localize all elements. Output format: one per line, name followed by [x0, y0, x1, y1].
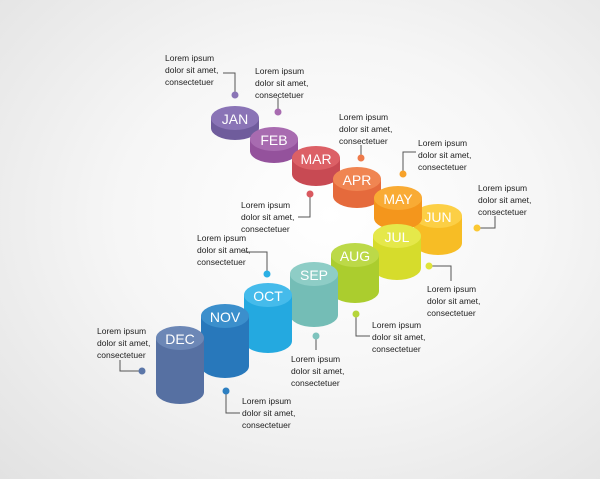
- callout: DEC: [97, 326, 150, 374]
- callout: MAR: [241, 190, 314, 234]
- callout: OCT: consectetuer: [197, 257, 246, 267]
- cylinder: SEP: SEP: [300, 267, 328, 283]
- callout: SEP: dolor sit amet,: [291, 366, 344, 376]
- cylinder: MAR: [292, 146, 340, 186]
- callout: SEP: consectetuer: [291, 378, 340, 388]
- callout: JAN: [165, 53, 238, 98]
- callout: APR: Lorem ipsum: [339, 112, 388, 122]
- callout: MAY: dolor sit amet,: [418, 150, 471, 160]
- callout: JUL: [426, 262, 480, 318]
- callout: JAN: Lorem ipsum: [165, 53, 214, 63]
- cylinder: AUG: [331, 243, 379, 303]
- callout: NOV: dolor sit amet,: [242, 408, 295, 418]
- cylinder: JAN: JAN: [222, 111, 248, 127]
- cylinder: JUN: JUN: [424, 209, 452, 225]
- callout: MAR: consectetuer: [241, 224, 290, 234]
- callout: JUN: Lorem ipsum: [478, 183, 527, 193]
- callout: OCT: dolor sit amet,: [197, 245, 250, 255]
- cylinder: APR: [333, 167, 381, 208]
- callout: NOV: Lorem ipsum: [242, 396, 291, 406]
- cylinder: FEB: FEB: [260, 132, 288, 148]
- callout: MAR: dolor sit amet,: [241, 212, 294, 222]
- callout: OCT: [197, 233, 270, 278]
- callout: FEB: consectetuer: [255, 90, 304, 100]
- callout: FEB: [255, 66, 308, 116]
- callout: JUN: [474, 183, 531, 232]
- cylinder: JUL: JUL: [385, 229, 410, 245]
- callout: AUG: dolor sit amet,: [372, 332, 425, 342]
- callout: JUL: consectetuer: [427, 308, 476, 318]
- callout: AUG: Lorem ipsum: [372, 320, 421, 330]
- cylinder: APR: APR: [343, 172, 371, 188]
- callout: JUN: consectetuer: [478, 207, 527, 217]
- callout: DEC: Lorem ipsum: [97, 326, 146, 336]
- cylinder: NOV: NOV: [210, 309, 241, 325]
- cylinder: JAN: [211, 106, 259, 140]
- cylinder: DEC: DEC: [165, 331, 195, 347]
- callout: APR: consectetuer: [339, 136, 388, 146]
- cylinder: JUL: [373, 224, 421, 280]
- cylinder: DEC: [156, 326, 204, 404]
- callout: SEP: Lorem ipsum: [291, 354, 340, 364]
- cylinder: FEB: [250, 127, 298, 163]
- cylinder: JUN: [414, 204, 462, 255]
- callout: JAN: consectetuer: [165, 77, 214, 87]
- cylinder: AUG: AUG: [340, 248, 370, 264]
- callout: SEP: [291, 332, 344, 388]
- callout: MAY: Lorem ipsum: [418, 138, 467, 148]
- callout: DEC: consectetuer: [97, 350, 146, 360]
- callout: NOV: [222, 388, 295, 430]
- callout: FEB: dolor sit amet,: [255, 78, 308, 88]
- callout: APR: dolor sit amet,: [339, 124, 392, 134]
- cylinder: MAR: MAR: [300, 151, 332, 167]
- callout: MAY: [400, 138, 471, 178]
- cylinder: SEP: [290, 262, 338, 327]
- callout: JUL: Lorem ipsum: [427, 284, 476, 294]
- callout: APR: [339, 112, 392, 162]
- cylinder: OCT: [244, 283, 292, 353]
- callout: AUG: [352, 310, 425, 354]
- callout: MAR: Lorem ipsum: [241, 200, 290, 210]
- cylinder: OCT: OCT: [253, 288, 283, 304]
- cylinder: MAY: MAY: [383, 191, 413, 207]
- cylinder: NOV: [201, 304, 249, 378]
- callout: NOV: consectetuer: [242, 420, 291, 430]
- callout: DEC: dolor sit amet,: [97, 338, 150, 348]
- callout: JUL: dolor sit amet,: [427, 296, 480, 306]
- callout: FEB: Lorem ipsum: [255, 66, 304, 76]
- callout: OCT: Lorem ipsum: [197, 233, 246, 243]
- callout: MAY: consectetuer: [418, 162, 467, 172]
- cylinder: MAY: [374, 186, 422, 230]
- callout: JAN: dolor sit amet,: [165, 65, 218, 75]
- callout: JUN: dolor sit amet,: [478, 195, 531, 205]
- callout: AUG: consectetuer: [372, 344, 421, 354]
